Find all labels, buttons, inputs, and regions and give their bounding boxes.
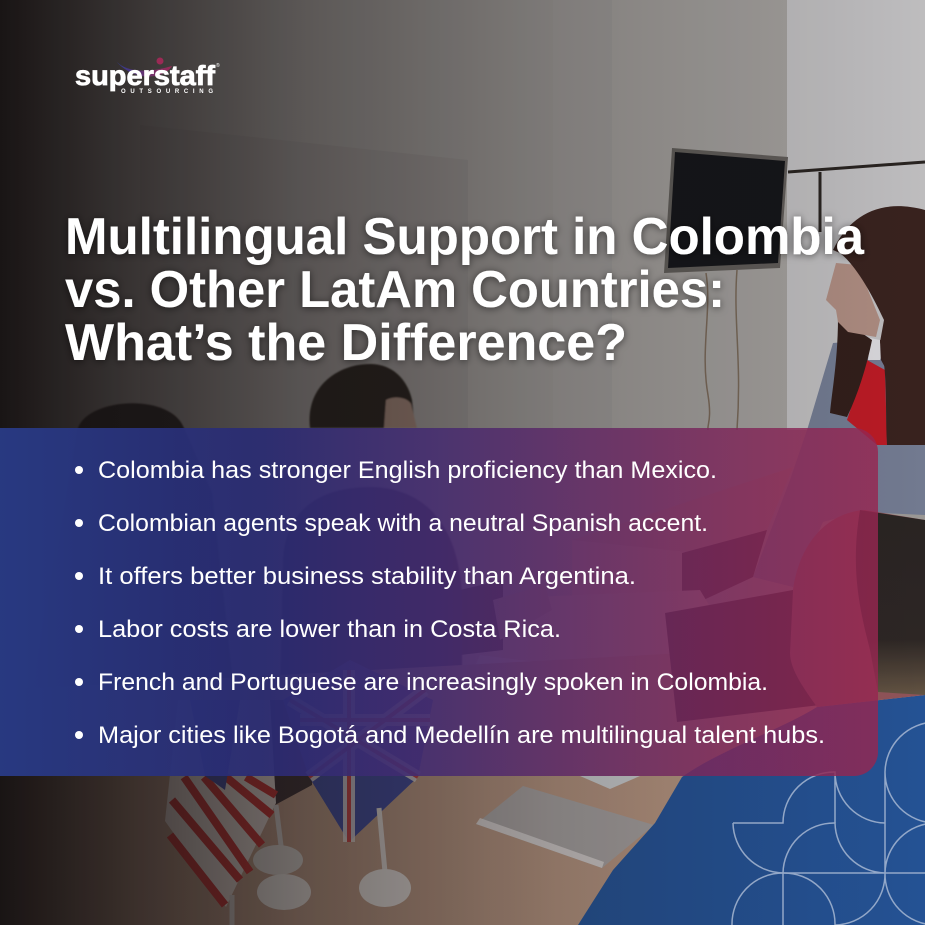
bullet list xyxy=(75,457,825,749)
title: What’s the Difference? xyxy=(65,314,627,372)
dark box between flags xyxy=(265,700,312,805)
whiteboard xyxy=(140,125,468,430)
bullet list: Major cities like Bogotá and Medellín are multilingual talent hubs. xyxy=(98,722,825,749)
left seated person xyxy=(30,403,235,700)
standing woman xyxy=(753,206,925,587)
panel: key points xyxy=(0,428,878,776)
hand and sleeve behind panel xyxy=(460,580,600,735)
bullet list: Colombian agents speak with a neutral Spanish accent. xyxy=(98,510,708,537)
wall-mounted tv xyxy=(664,148,925,430)
title: Multilingual Support in Colombia xyxy=(65,208,865,266)
bullet list: French and Portuguese are increasingly spoken in Colombia. xyxy=(98,669,768,696)
stationery behind panel xyxy=(580,776,640,789)
american flag xyxy=(165,700,311,925)
desk cabinet behind panel xyxy=(460,467,793,780)
decorative line pattern xyxy=(732,722,925,925)
man with denim shirt xyxy=(578,510,925,925)
bullet list: Labor costs are lower than in Costa Rica. xyxy=(98,616,561,643)
logo: OUTSOURCING xyxy=(121,89,213,95)
british flag xyxy=(283,660,433,907)
seated woman xyxy=(280,364,462,700)
logo: superstaff xyxy=(75,60,216,91)
title xyxy=(65,208,865,372)
laptop xyxy=(665,590,820,722)
logo: ® xyxy=(216,62,220,69)
wood table xyxy=(0,640,925,925)
bullet list: Colombia has stronger English proficiency than Mexico. xyxy=(98,457,717,484)
notebook xyxy=(476,786,654,868)
title: vs. Other LatAm Countries: xyxy=(65,261,725,319)
bullet list: It offers better business stability than Argentina. xyxy=(98,563,636,590)
